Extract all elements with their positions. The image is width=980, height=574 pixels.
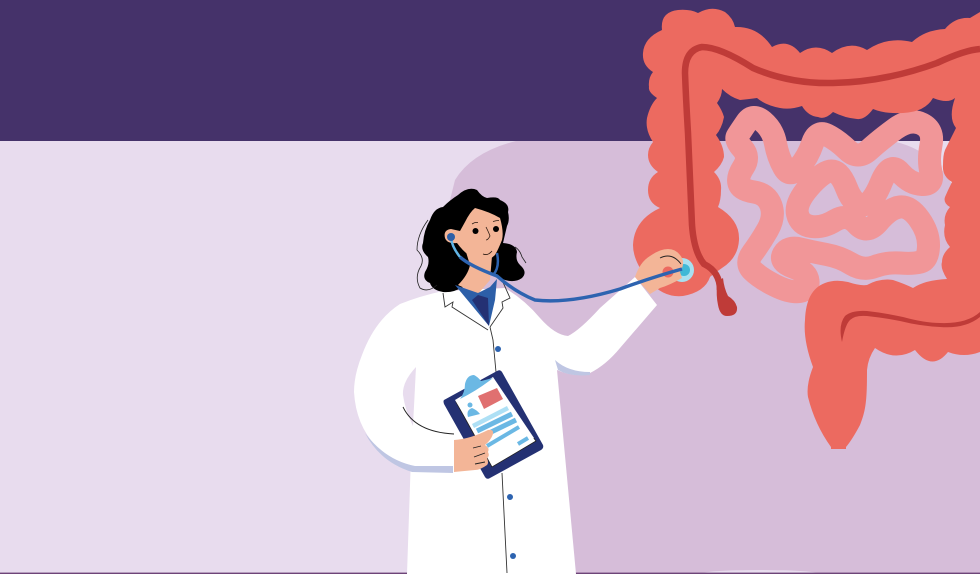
- colon inner stripe lower: [841, 311, 980, 342]
- small intestine: [737, 117, 932, 292]
- hair: [422, 189, 525, 292]
- coat shadow: [365, 360, 590, 473]
- arm crease: [403, 407, 454, 434]
- collar lines: [443, 280, 510, 573]
- white coat: [354, 277, 657, 574]
- shirt: [455, 279, 497, 326]
- red block: [478, 388, 503, 409]
- clip: [460, 375, 493, 399]
- face: [445, 208, 503, 260]
- ear piece: [447, 233, 455, 241]
- text lines: [473, 408, 528, 446]
- buttons: [495, 346, 516, 559]
- face features: [472, 220, 499, 255]
- right hand: [635, 249, 683, 294]
- stethoscope head: [670, 258, 694, 282]
- colon inner stripe upper: [685, 47, 980, 290]
- stethoscope tube: [451, 238, 682, 301]
- hair strands: [417, 220, 526, 290]
- large intestine: [633, 9, 980, 449]
- clipboard: [444, 370, 543, 479]
- neck: [458, 252, 492, 294]
- left hand: [454, 430, 493, 472]
- appendix: [717, 278, 737, 316]
- coat side fill: [403, 367, 440, 470]
- paper back: [456, 382, 536, 467]
- doctor: [354, 189, 694, 574]
- person icon: [468, 402, 480, 417]
- tie: [472, 295, 489, 326]
- paper: [455, 377, 534, 464]
